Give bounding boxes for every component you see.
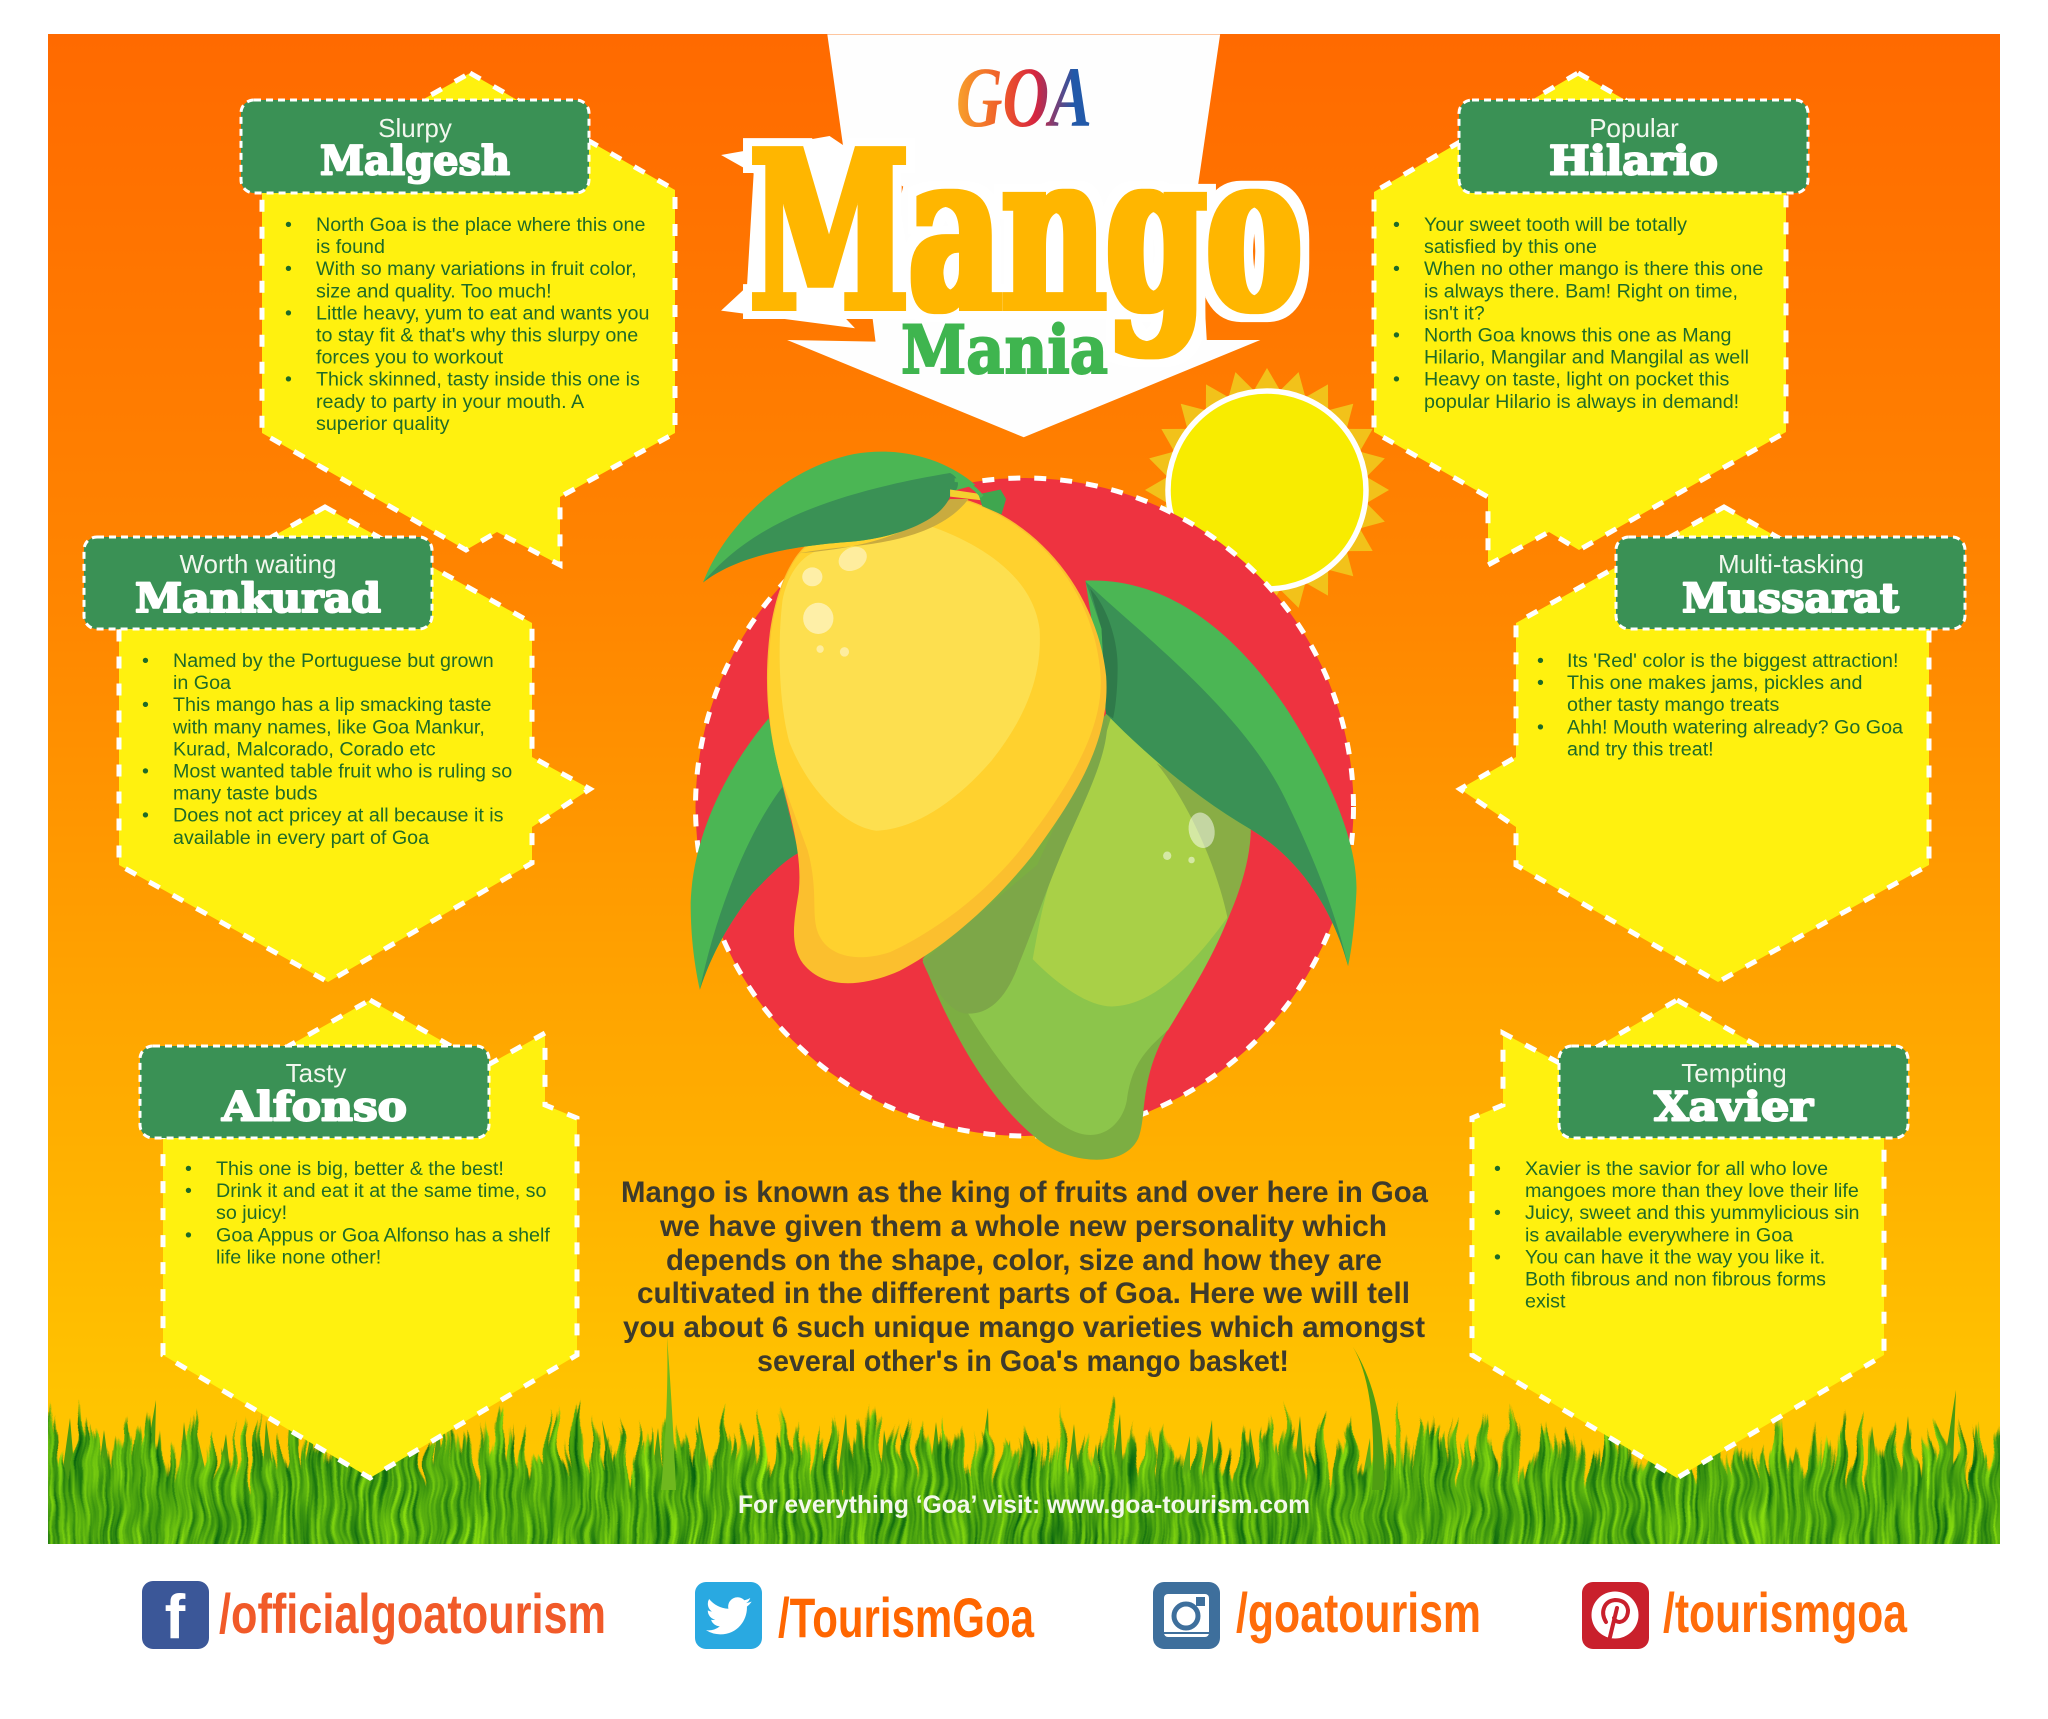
name: Hilario (1549, 138, 1718, 184)
bullet list: • (1393, 214, 1400, 236)
bullet list: so juicy! (216, 1202, 287, 1224)
bullet list: ready to party in your mouth. A (316, 391, 585, 413)
icon: pinterest (1582, 1582, 1649, 1649)
bullet list: Juicy, sweet and this yummylicious sin (1525, 1202, 1859, 1224)
bullet list: Most wanted table fruit who is ruling so (173, 760, 512, 782)
bullet list: • (142, 805, 149, 827)
tall grass blade left (661, 1337, 676, 1490)
bullet list: Xavier is the savior for all who love (1525, 1158, 1828, 1180)
hexagon shape (262, 73, 675, 565)
bullet list: • (1393, 258, 1400, 280)
title: Mango (721, 104, 1302, 360)
bullet list: • (1537, 716, 1544, 738)
bullet list: Does not act pricey at all because it is (173, 805, 504, 827)
hexagon shape (1374, 73, 1786, 565)
bullet list: superior quality (316, 413, 450, 435)
bullet list: With so many variations in fruit color, (316, 258, 637, 280)
sun (1145, 368, 1389, 612)
bullet list: • (185, 1158, 192, 1180)
name: Mussarat (1682, 575, 1900, 622)
bullet list: Heavy on taste, light on pocket this (1424, 369, 1729, 391)
subtitle: Tempting (1681, 1058, 1787, 1088)
bullet list: Goa Appus or Goa Alfonso has a shelf (216, 1224, 550, 1246)
name: Malgesh (320, 138, 510, 184)
hexagon shape (1472, 1000, 1884, 1478)
bullet list: Its 'Red' color is the biggest attraction! (1567, 650, 1898, 672)
bullet list: other tasty mango treats (1567, 694, 1779, 716)
bullet list: • (185, 1224, 192, 1246)
bullet list: exist (1525, 1291, 1566, 1313)
panel: Mussarat (1460, 507, 1965, 982)
bullet list: Kurad, Malcorado, Corado etc (173, 738, 436, 760)
intro paragraph: you about 6 such unique mango varieties which amongst (623, 1311, 1425, 1344)
yellow mango (767, 499, 1107, 983)
bullet list: mangoes more than they love their life (1525, 1180, 1859, 1202)
bullet list: North Goa is the place where this one (316, 214, 645, 236)
header (1459, 100, 1808, 193)
header (84, 537, 432, 629)
subtitle: Multi-tasking (1718, 549, 1864, 579)
icon: twitter (695, 1582, 762, 1649)
twitter handle: /TourismGoa (778, 1586, 1035, 1649)
bullet list: • (1393, 324, 1400, 346)
subtitle: Worth waiting (179, 549, 337, 579)
panel: Xavier (1472, 1000, 1908, 1478)
bullet list: Hilario, Mangilar and Mangilal as well (1424, 347, 1749, 369)
bullet list: • (1494, 1158, 1501, 1180)
hexagon shape (1460, 507, 1929, 982)
panel: Hilario (1374, 73, 1808, 565)
pinterest handle: /tourismgoa (1663, 1581, 1908, 1644)
bullet list: This mango has a lip smacking taste (173, 694, 491, 716)
facebook handle: /officialgoatourism (219, 1582, 606, 1645)
bullet list: popular Hilario is always in demand! (1424, 391, 1739, 413)
icon: facebook (142, 1581, 209, 1652)
bullet list: satisfied by this one (1424, 236, 1597, 258)
bullet list: • (142, 760, 149, 782)
tall grass blade right (1353, 1347, 1384, 1490)
bullet list: When no other mango is there this one (1424, 258, 1763, 280)
subtitle: Tasty (286, 1058, 346, 1088)
panel: Alfonso (140, 1000, 577, 1478)
bullet list: • (1393, 369, 1400, 391)
bullet list: • (285, 258, 292, 280)
title: Mango: Mango (750, 104, 1302, 360)
bullet list: • (1537, 650, 1544, 672)
title: Mania: Mania (901, 311, 1108, 389)
bullet list: • (142, 650, 149, 672)
bullet list: Named by the Portuguese but grown (173, 650, 494, 672)
bullet list: • (285, 214, 292, 236)
bullet list: Both fibrous and non fibrous forms (1525, 1268, 1826, 1290)
name: Xavier (1654, 1084, 1814, 1130)
left leaf (691, 718, 799, 990)
bullet list: is always there. Bam! Right on time, (1424, 280, 1738, 302)
bullet list: • (1537, 672, 1544, 694)
bullet list: • (142, 694, 149, 716)
bullet list: Your sweet tooth will be totally (1424, 214, 1687, 236)
right leaf (1085, 580, 1356, 966)
name: Mankurad (135, 575, 381, 622)
goa logo: GOA (956, 49, 1092, 145)
bullet list: is found (316, 236, 385, 258)
bullet list: forces you to workout (316, 347, 504, 369)
bullet list: • (1494, 1246, 1501, 1268)
intro paragraph: we have given them a whole new personality which (659, 1210, 1387, 1243)
mango stem (950, 480, 1006, 515)
bullet list: North Goa knows this one as Mang (1424, 324, 1732, 346)
website line: For everything ‘Goa’ visit: www.goa-tourism.com (738, 1491, 1310, 1519)
intro paragraph: Mango is known as the king of fruits and over here in Goa (621, 1176, 1428, 1209)
top leaf (703, 452, 975, 583)
bullet list: Thick skinned, tasty inside this one is (316, 369, 640, 391)
bullet list: Ahh! Mouth watering already? Go Goa (1567, 716, 1903, 738)
intro paragraph: cultivated in the different parts of Goa. Here we will tell (637, 1277, 1410, 1310)
intro paragraph (621, 1176, 1428, 1378)
bullet list: • (1494, 1202, 1501, 1224)
hexagon shape (119, 507, 590, 982)
panel: Malgesh (241, 73, 675, 565)
bullet list: life like none other! (216, 1246, 381, 1268)
bullet list: isn't it? (1424, 302, 1485, 324)
white title arrow (787, 34, 1260, 437)
header (241, 100, 589, 193)
bullet list: This one is big, better & the best! (216, 1158, 504, 1180)
bullet list: in Goa (173, 672, 231, 694)
bullet list: • (185, 1180, 192, 1202)
bullet list: This one makes jams, pickles and (1567, 672, 1862, 694)
hexagon shape (163, 1000, 577, 1478)
mango illustration (691, 452, 1356, 1160)
header (140, 1046, 489, 1138)
bullet list: • (285, 369, 292, 391)
bullet list: You can have it the way you like it. (1525, 1246, 1825, 1268)
header (1616, 537, 1965, 629)
subtitle: Popular (1589, 113, 1679, 143)
instagram handle: /goatourism (1236, 1581, 1481, 1644)
bullet list: many taste buds (173, 783, 318, 805)
header (1559, 1046, 1908, 1138)
panel: Mankurad (84, 507, 590, 982)
icon: instagram (1153, 1582, 1220, 1649)
bullet list: to stay fit & that's why this slurpy one (316, 324, 638, 346)
bullet list: Little heavy, yum to eat and wants you (316, 302, 649, 324)
grass strip (48, 1390, 2000, 1544)
red dashed circle (696, 478, 1354, 1136)
bullet list: available in every part of Goa (173, 827, 429, 849)
bullet list: Drink it and eat it at the same time, so (216, 1180, 547, 1202)
intro paragraph: depends on the shape, color, size and how they are (666, 1244, 1382, 1277)
bullet list: • (285, 302, 292, 324)
bullet list: size and quality. Too much! (316, 280, 552, 302)
icon: facebook: f (165, 1583, 186, 1652)
bullet list: is available everywhere in Goa (1525, 1224, 1793, 1246)
bullet list: and try this treat! (1567, 738, 1714, 760)
name: Alfonso (221, 1084, 407, 1130)
subtitle: Slurpy (378, 113, 452, 143)
intro paragraph: several other's in Goa's mango basket! (757, 1345, 1289, 1378)
green mango (923, 714, 1251, 1160)
bullet list: with many names, like Goa Mankur, (172, 716, 485, 738)
